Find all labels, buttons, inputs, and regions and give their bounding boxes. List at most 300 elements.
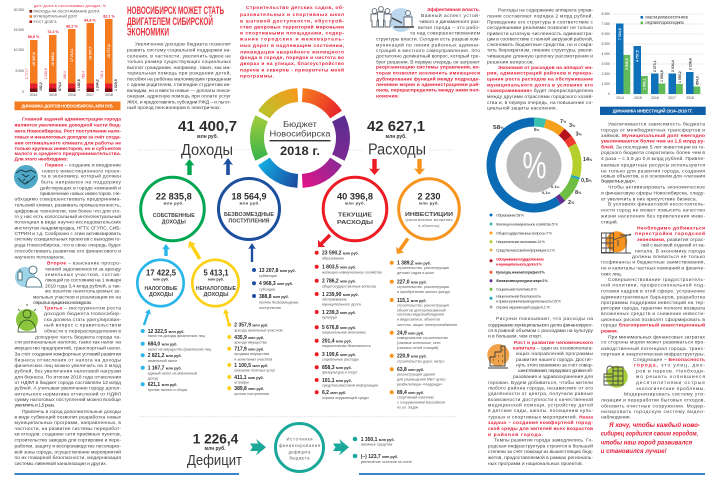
income total: млн руб. — [197, 133, 218, 140]
text block: first measure: рода Новосибирска, что в свою очередь будет — [14, 242, 122, 248]
text block: restructuring the economy: ритории города, гарантии полного возврата — [601, 306, 705, 311]
red text block: main task: только крупных инвесторов, но и субъектов — [14, 145, 121, 152]
list: current expenses breakdown: культура — [322, 316, 338, 320]
text block: third measure: работки, защиту и воспроизводство лесопарко- — [14, 444, 121, 450]
circle: grants: 18 564,9 — [232, 191, 266, 201]
donut chart legend: Культура, кинематография 3 % — [496, 270, 546, 275]
arrow: grants up — [223, 158, 233, 175]
list: investments breakdown: (газовые котельные, сети — [397, 341, 440, 345]
banner: debt dynamics — [14, 102, 120, 110]
red text block: kindergartens and schools: и спортивными площадками, содер- — [240, 32, 344, 37]
donut chart legend — [490, 212, 562, 309]
circle: deficit financing sources: бюджета — [290, 456, 310, 461]
donut percent labels — [493, 119, 593, 206]
deficit total — [187, 430, 242, 469]
red text block: main task: Главной задачей администрации города — [22, 116, 121, 123]
list: current expenses breakdown: обслуживание — [322, 297, 347, 301]
donut percent labels: 3% — [569, 123, 576, 129]
list: investments breakdown: 115,1 млн руб. — [397, 298, 427, 304]
deficit total: млн руб. — [204, 445, 226, 452]
chart axis labels — [14, 8, 24, 94]
text block: human capital: и районов города. — [488, 431, 544, 438]
list: non-tax income breakdown: аренда земельных участков — [234, 328, 283, 332]
text block: effective government: торая позволит исключить имеющееся — [376, 71, 480, 76]
chart bars: 1 510,8 — [44, 68, 48, 79]
list: non-tax income breakdown: оказание платных услуг — [234, 369, 276, 373]
investment chart bars: 854,3 — [696, 76, 700, 85]
text block: environment: наблюдения. — [601, 415, 631, 421]
text block: effective government: структуры власти. Сегодня есть разрыв ком- — [376, 36, 480, 42]
text block: restructuring the economy: изводственный потенциал города, транс- — [601, 345, 705, 352]
list: investments breakdown: 24,9 млн руб. — [397, 330, 424, 336]
text block: environment — [601, 357, 705, 421]
text block: budget income growth: ный проезд пенсионерам в электричках. — [127, 104, 221, 111]
list: investments breakdown: по ул. Задач — [397, 406, 418, 410]
text block: human capital: развития нашего города. Достиг- — [516, 357, 593, 363]
text block: human capital: нуть этого возможно за счёт совер- — [516, 363, 593, 369]
text block: second measure: Второе – взыскание просро- — [47, 260, 121, 266]
text block: third measure: За счёт создания комфортных условий развития — [14, 351, 121, 358]
text block: effective government: муникаций по линии районных админи- — [376, 41, 480, 48]
text block: third measure: увеличить в 1,5 раза. — [14, 403, 55, 409]
text block: budget income growth — [127, 42, 232, 111]
text block: restructuring the economy: питала. В экономику города — [635, 248, 705, 254]
chart axis labels: 20 000 — [14, 8, 24, 12]
investment chart bars: 2 073,1 — [653, 60, 657, 72]
donut percent labels: 2% — [568, 200, 575, 206]
text block: restructuring the economy: экономики, развития отрас- — [637, 238, 705, 243]
red text block: kindergartens and schools: в шаговой доступности, обустрой- — [240, 17, 344, 24]
investment chart legend — [640, 15, 689, 25]
donut percent labels: 5% — [534, 127, 539, 132]
icon: people and official — [371, 7, 414, 32]
circle: non-tax income: млн руб. — [208, 278, 224, 282]
text block: restructuring the economy: вложенных средств и снижение инвести- — [601, 312, 705, 317]
investment chart bars: 2018 — [686, 96, 694, 100]
list: investments breakdown: и приобретение жилого фонда — [397, 290, 451, 294]
text block: first measure: нового инвестиционного проек- — [42, 169, 121, 174]
text block: dependence on transfers: ности город не может повысить качество — [601, 209, 705, 214]
list: investments breakdown: коммунальное строительство — [397, 336, 448, 340]
text block: effective government — [376, 6, 481, 100]
text block: budget income growth: Увеличение доходов бюджета позволит — [135, 42, 232, 48]
text block: restructuring the economy: ционных рисков позволят сформировать в — [601, 317, 705, 323]
dotted divider: lower — [140, 416, 457, 418]
red text block: kindergartens and schools: жание городских и межкварталь- — [239, 38, 344, 43]
red text block: main task: малого и среднего предпринимательства. — [14, 152, 122, 157]
circle: investments: в объекты) — [418, 224, 440, 228]
text block: second measure: открытых аукционах и конкурсах. — [33, 301, 92, 306]
text block: administration costs: Расходы на содержание аппарата управ- — [498, 8, 593, 14]
chart bars: 1 244,2 — [96, 79, 100, 91]
text block: human capital: капитала – один из основополага- — [513, 347, 593, 352]
list: current expenses breakdown: 1 239,3 млн руб. — [322, 310, 356, 316]
list: deficit sources: увеличение остатков на счете — [361, 460, 412, 464]
red text block: main task: говых и неналоговых доходов за счёт созда- — [14, 134, 121, 140]
list: investments breakdown: 63,8 млн руб. — [397, 367, 424, 373]
text block: second measure: ченной задолженности за аренду — [45, 265, 122, 272]
chart axis labels: 15 000 — [14, 28, 24, 32]
text block: third measure: имущество предприятий, транспортный налог. — [14, 345, 121, 352]
text block: human capital: шенствования, передового уровня об- — [518, 368, 593, 374]
text block: second measure: земельных участков, состав- — [45, 273, 121, 278]
text block: dependence on transfers: увеличивается более чем на 1,5 млрд ру- — [601, 138, 705, 145]
donut chart legend: Охрана окружающей среды 0,1 % — [496, 304, 551, 309]
donut percent labels: 0,1% — [542, 190, 551, 195]
red text block: kindergartens and schools: ных дорог в надлежащем состоянии, — [240, 44, 345, 49]
list: current expenses breakdown: 101,1 млн руб. — [322, 378, 352, 384]
circle: grants — [218, 178, 280, 240]
text block: effective government: Эффективная власть. — [427, 6, 481, 13]
list: investments breakdown: строительство, реконструкция — [397, 266, 449, 270]
icon: virus and person — [16, 304, 38, 332]
investment chart axis: 7 000 — [602, 22, 610, 26]
text block: third measure: ный вопрос с правительством — [44, 321, 122, 328]
text block: third measure: Привлечь в город дополнительные доходы — [22, 409, 121, 415]
text block: first measure: обходимо совершенствовать предпринима- — [14, 197, 121, 203]
circle: current expenses: РАСХОДЫ — [337, 220, 373, 226]
list: investments breakdown: строительство дорог, метро — [397, 359, 444, 363]
circle: investments: млн руб. — [419, 201, 439, 206]
circle: current expenses: ТЕКУЩИЕ — [338, 212, 373, 218]
text block: dependence on transfers: займов. Муниципальный долг ежегодно — [601, 132, 705, 139]
donut percent labels: 3% — [576, 132, 583, 138]
arrow: investments list — [393, 236, 412, 257]
chart bars — [25, 14, 118, 97]
text block: restructuring the economy: При минимальных финансовых затратах — [608, 334, 706, 340]
red text block: main task: Для этого необходимо: — [14, 155, 68, 162]
investment chart axis — [602, 12, 610, 96]
text block: budget income growth: валидам, но и ввести новые — доплаты пенси- — [127, 89, 231, 94]
text block: first measure: та в экономику, который должен — [41, 172, 121, 179]
red text block: kindergartens and schools: парков и скверов - приоритеты моей — [240, 66, 344, 73]
list: investments breakdown: 227,0 млн руб. — [397, 280, 427, 286]
text block: environment: десятилетиями острые — [636, 381, 705, 386]
text block: restructuring the economy: госфинансы и бюджетные заимствования, — [601, 260, 705, 266]
text block: dependence on transfers: и финансовую сферы Новосибирска, следу- — [601, 191, 705, 197]
text block: administration costs: Проведение его структуры в соответствие с — [487, 19, 594, 25]
text block: human capital: разования и здравоохранения для — [513, 375, 593, 380]
text block: third measure: нительного норматива отчислений от НДФЛ — [14, 390, 121, 397]
list: current expenses breakdown: 23 590,2 млн руб. — [322, 250, 359, 256]
investment chart bars: 2 034,4 — [671, 60, 675, 72]
text block: budget income growth: только размер существующих социальных — [127, 60, 232, 65]
list: current expenses breakdown: 2 786,2 млн руб. — [322, 278, 356, 284]
text block: first measure: СТРИН и т.д. Сообразно с этим активизировать — [14, 231, 121, 237]
text block: budget income growth: пособия на ребёнка малоимущим гражданам — [127, 76, 232, 82]
text block: effective government: реорганизацию системы управления, ко- — [376, 66, 480, 71]
arrow: sources to list — [333, 439, 349, 456]
icon: crane and building — [601, 231, 631, 253]
banner: investment dynamics — [600, 107, 706, 115]
list: investments breakdown: 220,9 млн руб. — [397, 354, 427, 360]
text block: human capital: жетов, предоставляемой в рамках региональ- — [488, 454, 593, 461]
text block: dependence on transfers: жизни населения без привлечения инве- — [601, 214, 705, 220]
circle: deficit financing sources: дефицита — [288, 450, 311, 455]
arrow: current expenses down — [369, 159, 380, 175]
list: tax income breakdown: 12 322,5 млн руб. — [148, 329, 184, 335]
list: investments breakdown: строительство, реконструкция — [397, 285, 449, 289]
text block: first measure: научного потенциала. — [14, 255, 65, 260]
arrow: list to grants — [248, 243, 256, 262]
text block: environment: низировать городскую систему видео- — [601, 410, 705, 415]
text block: third measure: системы ливневой канализации и других. — [14, 460, 107, 467]
text block: effective government: достаточно деликатный вопрос, который тре- — [376, 53, 480, 60]
list: investments breakdown: объектов централизованной — [397, 308, 446, 312]
heading: Novosibirsk can become the engine of the Siberian economy: НОВОСИБИРСК МОЖЕТ СТАТЬ — [127, 5, 224, 17]
text block: third measure — [14, 305, 122, 467]
text block: human capital: Темпы развития города замедлились. Го- — [494, 438, 593, 444]
text block: administration costs — [487, 8, 594, 112]
banner: investment dynamics: ДИНАМИКА ИНВЕСТИЦИЙ 2014–2018 ГГ. — [613, 108, 693, 113]
red text block: kindergartens and schools: ство дворовых территорий мировыми — [240, 23, 344, 30]
chart bars: 1 029,9 — [114, 79, 118, 91]
donut chart: budget expenses percent — [491, 119, 593, 208]
list: current expenses breakdown: национальная безопасность — [322, 344, 371, 348]
investment chart bars: 4 757,5 — [636, 50, 640, 62]
list: current expenses breakdown: социальные расходы — [322, 358, 359, 362]
list: tax income breakdown: налог на имущество физических лиц — [148, 347, 212, 351]
text block: dependence on transfers: Увеличивается зависимость бюджета — [608, 122, 705, 128]
investment chart bars — [616, 24, 700, 100]
list: tax income breakdown: доход — [148, 376, 159, 380]
circle: investments: (капитальные вложения — [406, 218, 452, 222]
donut percent labels: 7% — [560, 119, 567, 125]
text block: third measure: ки отходов: создание сети приёмных пунктов, — [14, 432, 121, 438]
text block: effective government: бует решения. В первую очередь он затронет — [376, 59, 481, 65]
circle: grants: ПОСТУПЛЕНИЯ — [228, 218, 270, 224]
list: investments breakdown: реабилитации «Надежда» — [397, 383, 442, 387]
list: grants breakdown: субсидии — [259, 287, 275, 291]
text block: human capital: ской среды для жителей всех возрастов — [488, 425, 593, 432]
list: current expenses breakdown: 1 803,5 млн руб. — [322, 264, 356, 270]
chart legend: РАСХОДЫ НА ОБСЛУЖИВАНИЕ ДОЛГА — [34, 9, 100, 13]
text block: environment: Следующее – Безопасность — [633, 357, 705, 363]
donut chart legend: Общегосударственные вопросы 7 % — [496, 230, 553, 235]
text block: dependence on transfers — [601, 122, 705, 226]
text block: first measure: тельский климат, развивать промышленность, — [14, 202, 121, 209]
text block: restructuring the economy: Совершенствование градостроитель- — [608, 277, 705, 283]
investment chart bars: 2 238,4 — [688, 58, 692, 70]
list: deficit sources: заемные средства — [361, 443, 393, 447]
text block: administration costs: между другими отраслями городского хозяй- — [487, 93, 593, 100]
arrow: deficit to sources — [250, 439, 266, 456]
text block: environment: Модернизировать систему ути- — [624, 392, 705, 398]
circle: deficit financing sources: финансирования — [279, 443, 320, 448]
red text block: kindergartens and schools — [239, 4, 345, 79]
callout: closing quote: Я хочу, чтобы каждый ново- — [608, 421, 700, 429]
list: investments breakdown: чистоты, защит. электроснабжения — [397, 323, 457, 327]
text block: human capital: Рисунки показывают, что расходы на — [496, 316, 593, 322]
chart legend: МУНИЦИПАЛЬНЫЙ ДОЛГ — [34, 15, 78, 19]
chart bars: 58,5 % — [28, 35, 40, 39]
text block: administration costs: сэкономить бюджетные средства, но и сокра- — [487, 42, 593, 48]
circle: non-tax income — [192, 260, 239, 306]
list: investments breakdown: детских садов и школ — [397, 271, 434, 275]
list: investments breakdown: 1 389,2 млн руб. — [397, 260, 431, 266]
list: investments breakdown: для размещения МБУ центр — [397, 378, 446, 382]
icon: handshake — [14, 165, 38, 189]
text block: human capital: и в большем, чем спорт. — [488, 334, 542, 340]
text block: second measure — [33, 260, 122, 306]
icon: buildings — [487, 344, 509, 368]
list: current expenses breakdown: охрана окружающей среды — [322, 396, 369, 400]
arrow: tax to own income — [162, 244, 170, 256]
circle: own income: ДОХОДЫ — [162, 220, 186, 226]
chart bars: 965,9 — [63, 71, 67, 79]
list: current expenses breakdown: 201,4 млн руб. — [322, 338, 352, 344]
list: investments breakdown: системы видеонаблюдения — [397, 313, 444, 317]
donut chart legend: Национальная экономика 14 % — [496, 239, 546, 244]
text block: dependence on transfers: родского бюджета сократились более чем в — [601, 150, 705, 156]
chart legend: долг долга в сопоставимых доходах, % — [34, 4, 107, 8]
banner: debt dynamics: ДИНАМИКА ДОЛГОВ НОВОСИБИРСКА, МЛН РУБ. — [22, 103, 114, 108]
donut percent labels: 8% — [575, 190, 582, 196]
red text block: kindergartens and schools: Строительство детских садов, об- — [246, 4, 344, 11]
list: investments breakdown: (газовых сетей станций) — [397, 346, 438, 350]
circle: grants: млн руб. — [240, 201, 260, 206]
text block: effective government: онов, перераспределить между ними пол- — [376, 89, 480, 94]
chart axis labels: 5 000 — [16, 69, 24, 73]
callout: closing quote: сибирец гордился своим городом, — [601, 430, 698, 438]
circle: non-tax income: 5 413,1 — [204, 269, 229, 278]
circle: investments: ИНВЕСТИЦИИ — [405, 212, 453, 218]
text block: budget income growth: териальная помощь при рождении детей, — [127, 70, 231, 77]
circle: own income — [141, 177, 204, 241]
chart axis labels: 10 000 — [14, 48, 24, 52]
text block: administration costs: привести штатную численность администра- — [487, 32, 593, 37]
list: investments breakdown: реконструкция здания — [397, 373, 435, 377]
arrow: tax list to tax income — [141, 308, 153, 326]
income total: Доходы — [181, 142, 233, 159]
list: current expenses breakdown: 5 676,8 млн руб. — [322, 325, 356, 331]
list: non-tax income breakdown: 2 357,9 млн руб. — [234, 322, 268, 328]
text block: administration costs: тить бюрократизм, лишние структуры, увели- — [487, 48, 593, 54]
text block: restructuring the economy: административных барьеров, разработка — [601, 294, 705, 300]
text block: third measure: частности, на развитие системы переработ- — [14, 426, 121, 432]
list: current expenses breakdown: образование — [322, 256, 344, 260]
text block: effective government: дублирование функций между подразде- — [376, 75, 480, 82]
text block: human capital: ся в равной объёмом с расходами на культуру — [488, 327, 594, 334]
chart legend — [30, 4, 107, 24]
text block: second measure: ляющей по состоянию на 1 января — [45, 277, 121, 284]
deficit total: Дефицит — [187, 453, 242, 469]
text block: administration costs: ции в соответствие с полной загрузкой работой, — [487, 36, 593, 43]
list: tax income breakdown: 684,0 млн руб. — [148, 342, 177, 348]
text block: first measure: быть направлен на поддержку — [41, 179, 122, 185]
list: deficit sources: (–) 123,7 млн руб. — [361, 454, 398, 460]
donut centre with percent sign: % — [522, 145, 546, 187]
list: grants breakdown: прочие безвозмездные — [259, 300, 298, 304]
text block: budget income growth: развить систему социальной поддержки на- — [127, 46, 231, 54]
text block: third measure: физических лиц можно увеличить на 2 млрд — [14, 363, 121, 369]
text block: budget income growth: селения, в частности, увеличить вдвое не — [127, 54, 231, 59]
donut chart legend: Социальная политика 8 % — [496, 287, 538, 292]
text block: first measure: институтов Академгородка, НГТУ, СГУПС, СИБ- — [14, 225, 121, 231]
text block: third measure: от НДФЛ в бюджет города составляли 12 млрд — [14, 380, 121, 386]
donut chart legend: Обслуживание государственного — [496, 257, 545, 262]
text block: human capital: возможности доступности к качественной — [488, 396, 593, 403]
text block: human capital: удалённости от центра, получали равные — [488, 391, 593, 397]
circle: tax income — [137, 260, 184, 306]
text block: dependence on transfers: блей. За последние 5 лет инвестиции из го- — [601, 143, 705, 150]
text block: budget income growth: выплат гражданам, например, таких, как ма- — [127, 66, 231, 71]
text block: third measure: сти региональных налогов, таких как налог на — [14, 341, 121, 346]
text block: third measure: бизнеса отчисления от налога на доходы — [14, 357, 121, 363]
red text block: kindergartens and schools: дворах и на улицах, благоустройство — [240, 60, 344, 67]
investment chart axis: 1 000 — [602, 82, 610, 86]
text block: restructuring the economy: Необходимо добиваться — [637, 224, 705, 231]
red text block: main task: ния оптимального климата для работы не — [14, 139, 121, 146]
arrow: current expenses list — [314, 231, 334, 251]
circle: own income: 22 835,8 — [156, 191, 192, 201]
investment chart bars: 1 050,2 — [678, 71, 682, 83]
text block: third measure: для бизнеса. По итогам 2018 года отчисления — [14, 374, 121, 380]
text block: first measure: действующих в городе компаний и — [40, 184, 121, 191]
icon: doctor — [15, 266, 42, 287]
text block: effective government: та над совершенствованием — [410, 32, 481, 37]
text block: dependence on transfers: бюджетных дыр». — [601, 178, 636, 184]
text block: third measure: по их пожарной безопасности, модернизация — [14, 454, 121, 461]
chart bars: 16 858,2 — [51, 52, 55, 66]
donut chart legend: Национальная безопасность — [496, 293, 541, 298]
red text block: kindergartens and schools: программы. — [240, 74, 275, 79]
text block: dependence on transfers: ет увеличить в них присутствие бизнеса. — [601, 196, 697, 202]
list: investments breakdown: и видеозаписи, объектов — [397, 317, 440, 321]
list: current expenses breakdown: физкультура и спорт — [322, 371, 358, 375]
text block: human capital: родская инфраструктура строится в большей — [488, 443, 593, 450]
list: current expenses breakdown: 1 239,90 млн руб. — [322, 292, 359, 298]
callout: closing quote — [601, 421, 700, 455]
text block: first measure: привлечение новых инвесторов. Не- — [40, 191, 121, 197]
chart bars: 86,2 % — [66, 24, 78, 28]
text block: third measure: доходов бюджета Новосибир- — [44, 311, 121, 317]
list: non-tax income breakdown: 1 100,5 млн руб. — [234, 363, 268, 369]
donut segments — [491, 122, 577, 208]
circle: non-tax income: ДОХОДЫ — [204, 292, 229, 298]
bar chart: city debt dynamics — [14, 4, 118, 97]
chart bars: 82,1 % — [103, 14, 115, 18]
list: current expenses breakdown: муниципального долга — [322, 302, 362, 306]
text block: human capital: содержание муниципального долга финансируют- — [488, 322, 593, 328]
text block: restructuring the economy: программы поддержки инвестиций на тер- — [601, 299, 705, 306]
dotted divider: upper — [139, 149, 454, 151]
text block: human capital: задача – создание комфортной город- — [488, 419, 593, 426]
list: current expenses breakdown: 858,3 млн руб. — [322, 365, 352, 371]
text block: budget income growth: ЖКХ, и предоставлять субсидии РЖД – и льгот- — [127, 99, 231, 105]
income total — [178, 118, 237, 159]
red text block: main task: жета Новосибирска. Рост поступления нало- — [14, 128, 121, 135]
text block: restructuring the economy: ских лиц. — [601, 272, 622, 277]
list: current expenses breakdown: общегосударственные вопросы — [322, 284, 377, 288]
list: grants breakdown: 4 968,3 млн руб. — [259, 281, 293, 287]
text block: first measure — [14, 163, 122, 260]
investment chart bars: 2016 — [651, 96, 659, 100]
investment chart axis: 2 000 — [602, 72, 610, 76]
list: tax income breakdown: 2 821,2 млн руб. — [148, 353, 182, 359]
investment chart bars: 1 862,1 — [642, 78, 646, 90]
list: investments breakdown: с сооружениями Бассейном — [397, 401, 445, 405]
list: tax income breakdown: земельный налог — [148, 359, 178, 363]
text block: dependence on transfers: 4 раза – с 3,9 до 0,8 млрд рублей. Привле- — [601, 155, 705, 162]
text block: dependence on transfers: стиций. — [601, 219, 618, 226]
list: tax income breakdown — [141, 329, 212, 392]
text block: third measure: сумму налоговых поступлений можно вообще — [14, 396, 121, 403]
expenses total: млн руб. — [386, 133, 407, 140]
donut chart legend: и правоохранительная деятельность 0,5 % — [496, 299, 562, 304]
arrow: own income up — [184, 159, 194, 175]
text block: dependence on transfers: не только для развития города, создания — [601, 169, 705, 174]
